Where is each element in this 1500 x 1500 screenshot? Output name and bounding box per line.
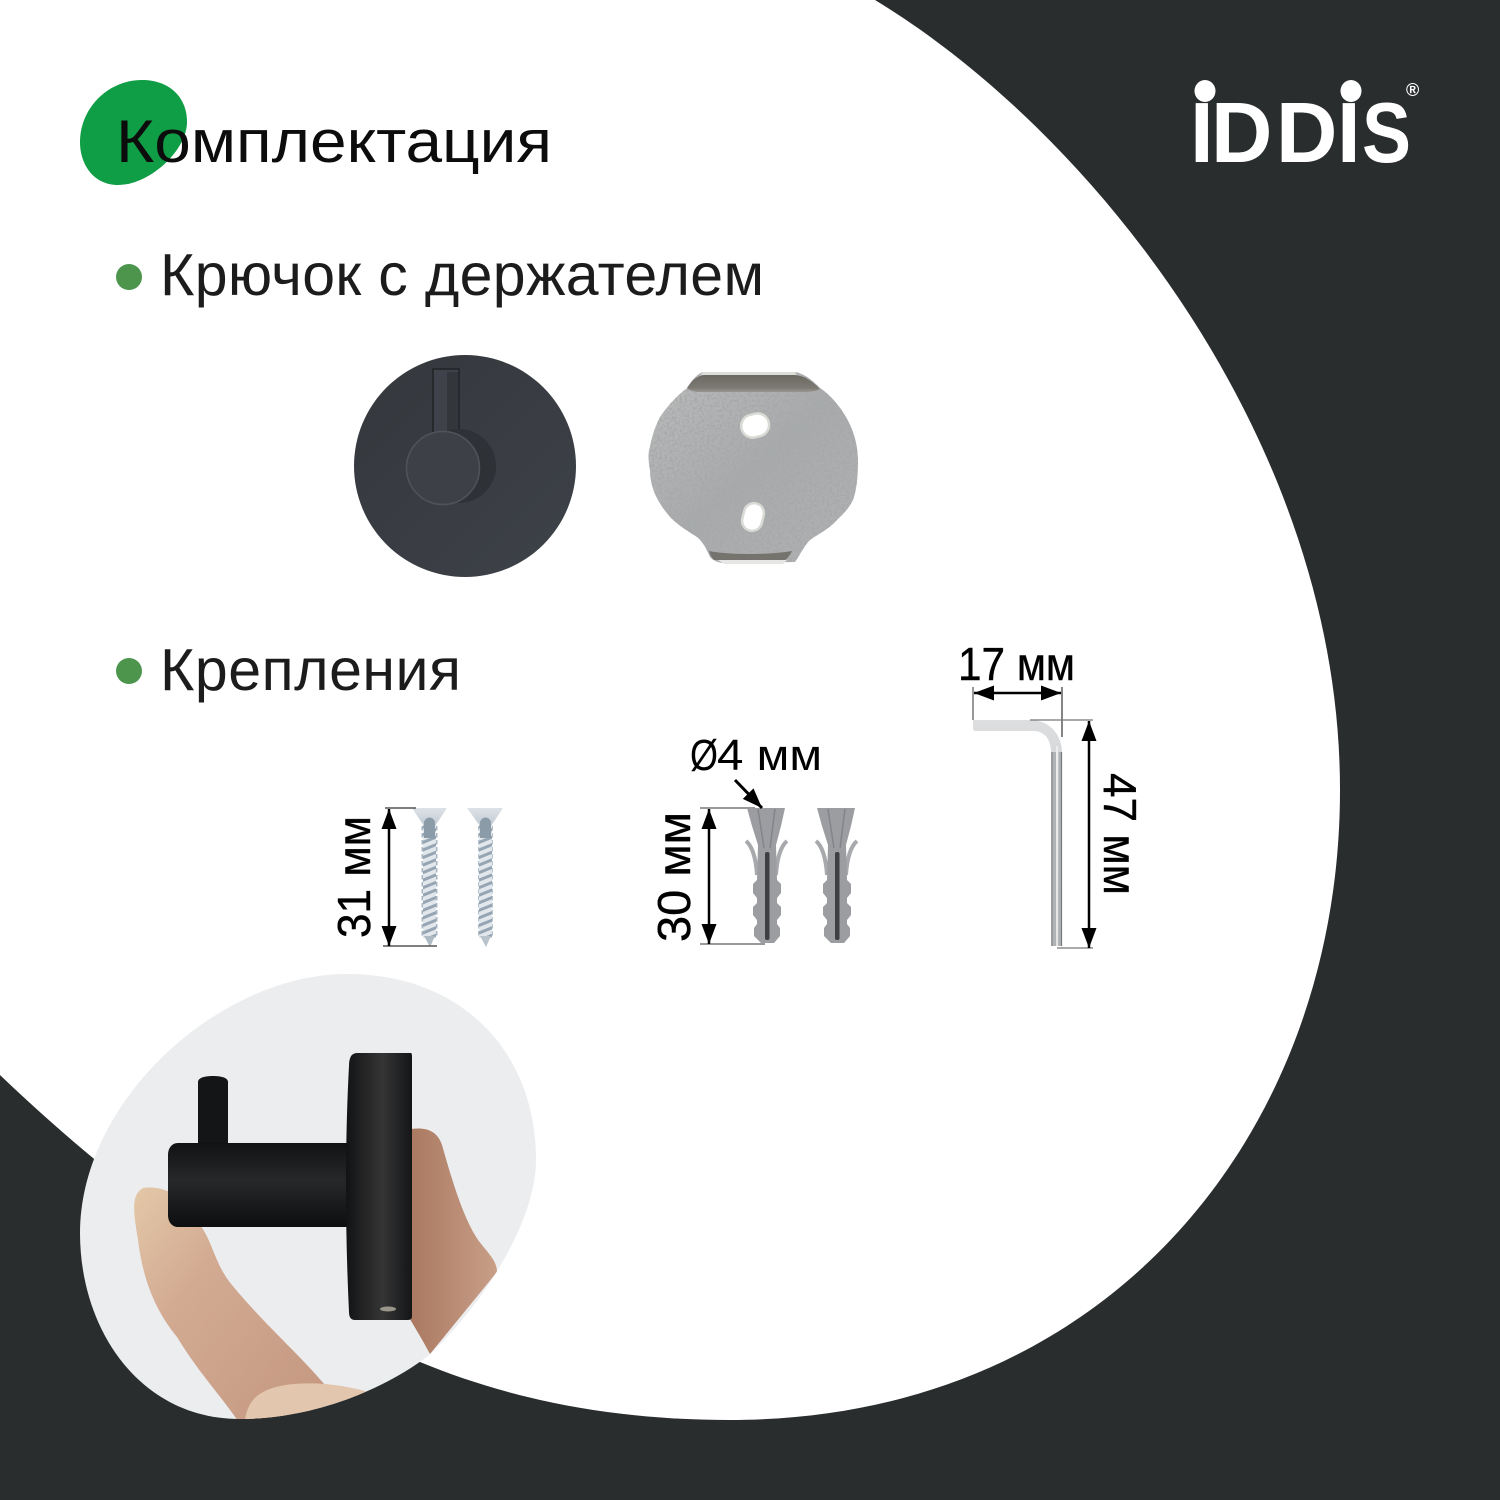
- dimension: wall plug diameter Ø4 мм: 4 мм: [717, 731, 822, 780]
- list item: Крепления: Крепления: [160, 637, 461, 703]
- icon: wall plug 1: [746, 808, 787, 943]
- logo: iDDiS: S: [1362, 86, 1411, 181]
- icon: screw 2: [467, 808, 503, 947]
- product: steel mounting bracket: [648, 372, 858, 564]
- dimension: screw length 31 мм: [328, 808, 437, 946]
- heading: Комплектация with green blob: Комплектация: [116, 108, 552, 175]
- icon: hex key: [973, 720, 1062, 946]
- icon: wall plug 2: [816, 808, 857, 943]
- dimension: wall plug length 30 мм: 30 мм: [648, 812, 700, 942]
- heading: Комплектация with green blob: [80, 80, 552, 185]
- dimension: screw length 31 мм: 31 мм: [328, 816, 380, 938]
- logo: iDDiS: IDDI: [1190, 86, 1361, 181]
- list item: Крючок с держателем: Крючок с держателем: [160, 242, 764, 308]
- photo: hand holding hook, side view: [70, 965, 550, 1430]
- dimension: hex key length 47 мм: 47 мм: [1094, 773, 1146, 895]
- icon: screw 1: [412, 808, 447, 947]
- dimension: wall plug length 30 мм: [648, 808, 765, 944]
- product: black round hook front view: [354, 355, 576, 577]
- dimension: hex key width 17 мм: [958, 638, 1075, 737]
- dimension: wall plug diameter Ø4 мм: [690, 731, 822, 808]
- dimension: hex key width 17 мм: 17 мм: [958, 638, 1075, 690]
- logo: iDDiS: ®: [1406, 80, 1419, 100]
- dimension: wall plug diameter Ø4 мм: Ø: [690, 731, 718, 780]
